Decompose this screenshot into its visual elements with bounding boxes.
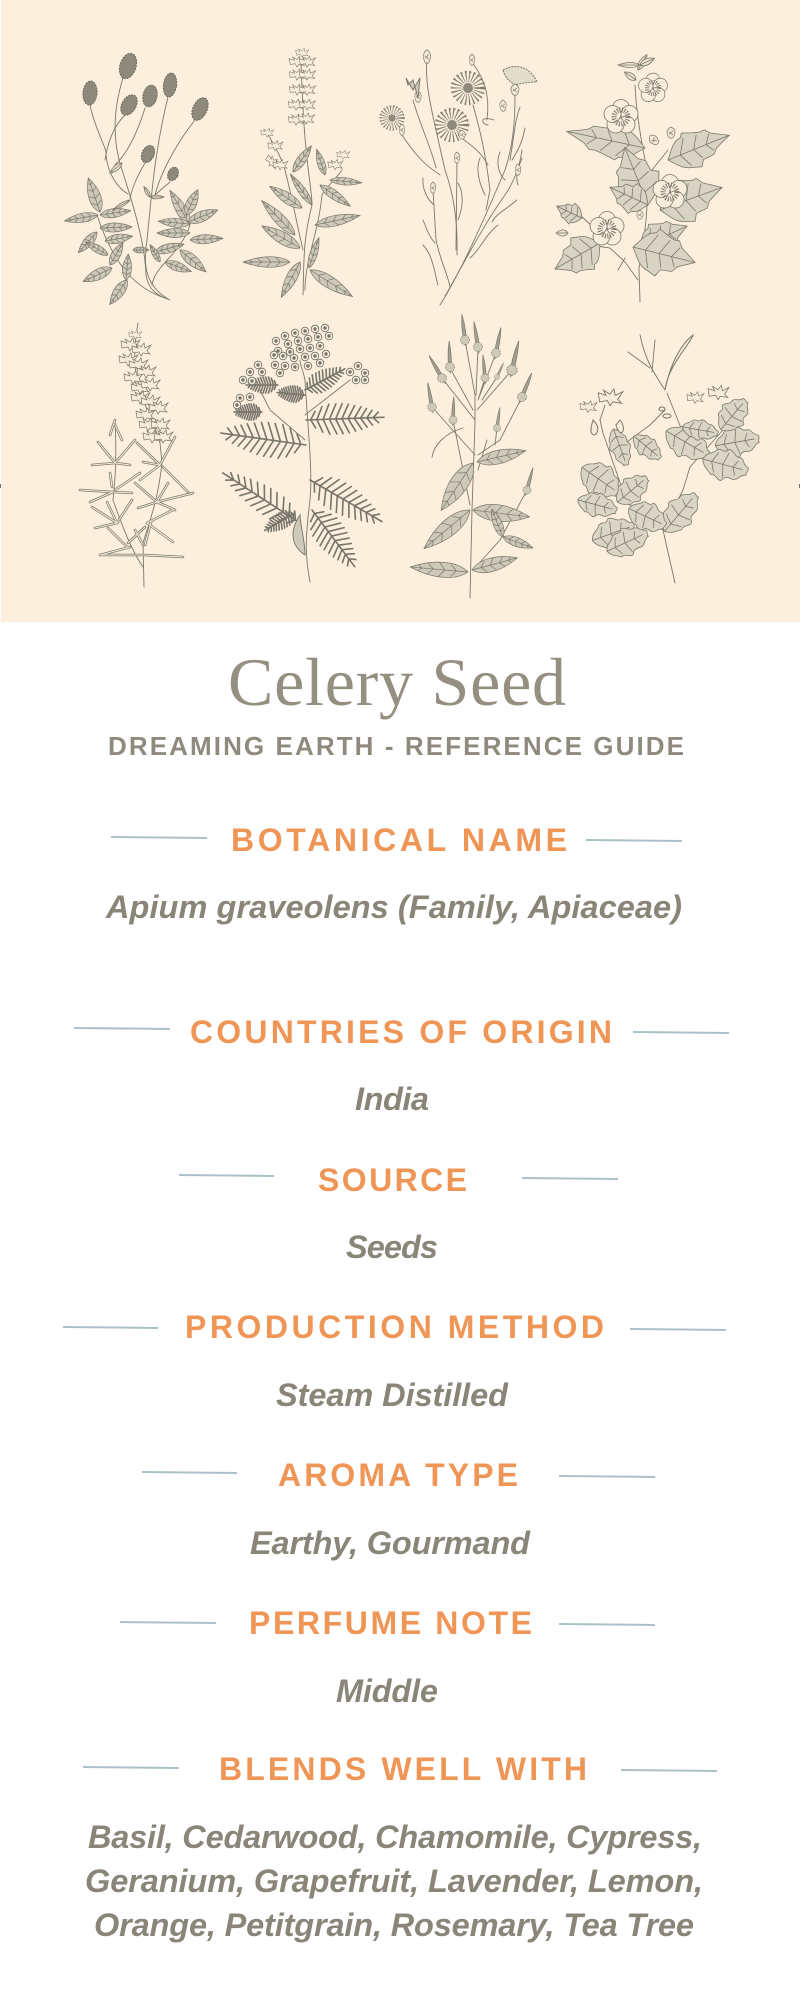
section: countries of origin: COUNTRIES OF ORIGIN xyxy=(190,1014,612,1050)
section: source: SOURCE xyxy=(318,1162,467,1198)
section: production method: PRODUCTION METHOD xyxy=(185,1309,604,1345)
section: countries of origin: India xyxy=(355,1081,429,1117)
section: production method: Steam Distilled xyxy=(276,1377,509,1413)
section: blends well with: BLENDS WELL WITH xyxy=(219,1751,587,1787)
section: botanical name: Apium graveolens (Family, Apiaceae) xyxy=(105,889,682,925)
cream background panel xyxy=(1,0,800,622)
plant 3: cornflower with thin stems xyxy=(380,50,537,305)
section: aroma type: AROMA TYPE xyxy=(278,1457,518,1493)
plant 2: sage with flower spike xyxy=(243,48,362,302)
plant 8: celandine with lobed leaves xyxy=(572,335,762,583)
section: blends well with: Orange, Petitgrain, Rosemary, Tea Tree xyxy=(94,1907,694,1943)
section: perfume note: Middle xyxy=(336,1673,438,1709)
section: perfume note xyxy=(120,1605,655,1709)
plant 6: tansy with feathered leaves and button flower clusters xyxy=(216,324,389,582)
section: blends well with xyxy=(83,1751,717,1943)
title: Celery Seed xyxy=(228,644,566,720)
plant 5: narrow-leaved herb with feathery spike xyxy=(80,323,193,587)
section: blends well with: Basil, Cedarwood, Chamomile, Cypress, xyxy=(88,1819,702,1855)
section: aroma type xyxy=(142,1457,655,1561)
subtitle: DREAMING EARTH - REFERENCE GUIDE xyxy=(108,731,684,761)
section: production method xyxy=(63,1309,726,1413)
plant 1: burnet with oval flower heads xyxy=(64,51,223,308)
section: botanical name: BOTANICAL NAME xyxy=(231,822,567,858)
plant 7: verbena with tapered flower spikes xyxy=(410,314,537,598)
section: perfume note: PERFUME NOTE xyxy=(249,1605,532,1641)
section: countries of origin xyxy=(74,1014,729,1117)
section: source xyxy=(179,1162,618,1265)
section: aroma type: Earthy, Gourmand xyxy=(250,1525,531,1561)
section: botanical name xyxy=(105,822,682,925)
plant 4: mallow with broad leaves and round flowers xyxy=(545,53,736,302)
section: blends well with: Geranium, Grapefruit, Lavender, Lemon, xyxy=(85,1863,703,1899)
edge marks xyxy=(0,484,800,488)
section: source: Seeds xyxy=(346,1229,438,1265)
